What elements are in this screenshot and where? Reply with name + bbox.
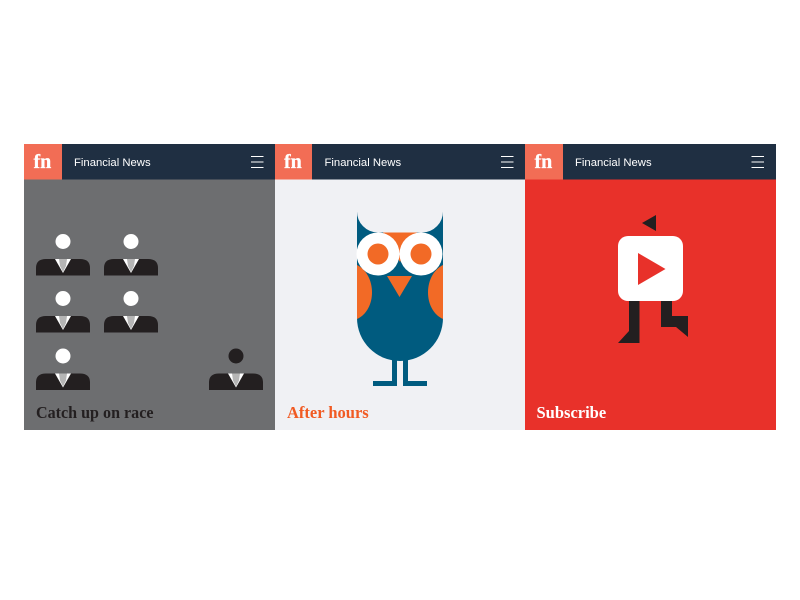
person 1 [36,234,90,276]
owl [356,211,443,386]
header: panel 2: fn [284,151,302,173]
header: panel 2 [275,144,525,180]
person 5 [36,348,90,390]
header: panel 1: fn [34,151,51,173]
icon: walking video play button [618,215,688,343]
label: after hours: After hours [287,403,369,422]
header: panel 3: fn [534,151,552,173]
panel: subscribe [525,144,776,430]
header: panel 3 [525,144,776,180]
person 4 [104,291,158,332]
person 3 [36,291,90,332]
header: panel 3: Financial News [575,157,652,169]
panel: catch up on race [24,144,275,430]
label: catch up on race: Catch up on race [36,403,154,422]
panel: after hours [275,144,525,430]
person 2 [104,234,158,276]
header: panel 2: Financial News [324,157,401,169]
label: subscribe: Subscribe [536,403,606,422]
person 6: dark head [209,348,263,390]
header: panel 1 [24,144,275,180]
header: panel 1: Financial News [74,157,151,169]
